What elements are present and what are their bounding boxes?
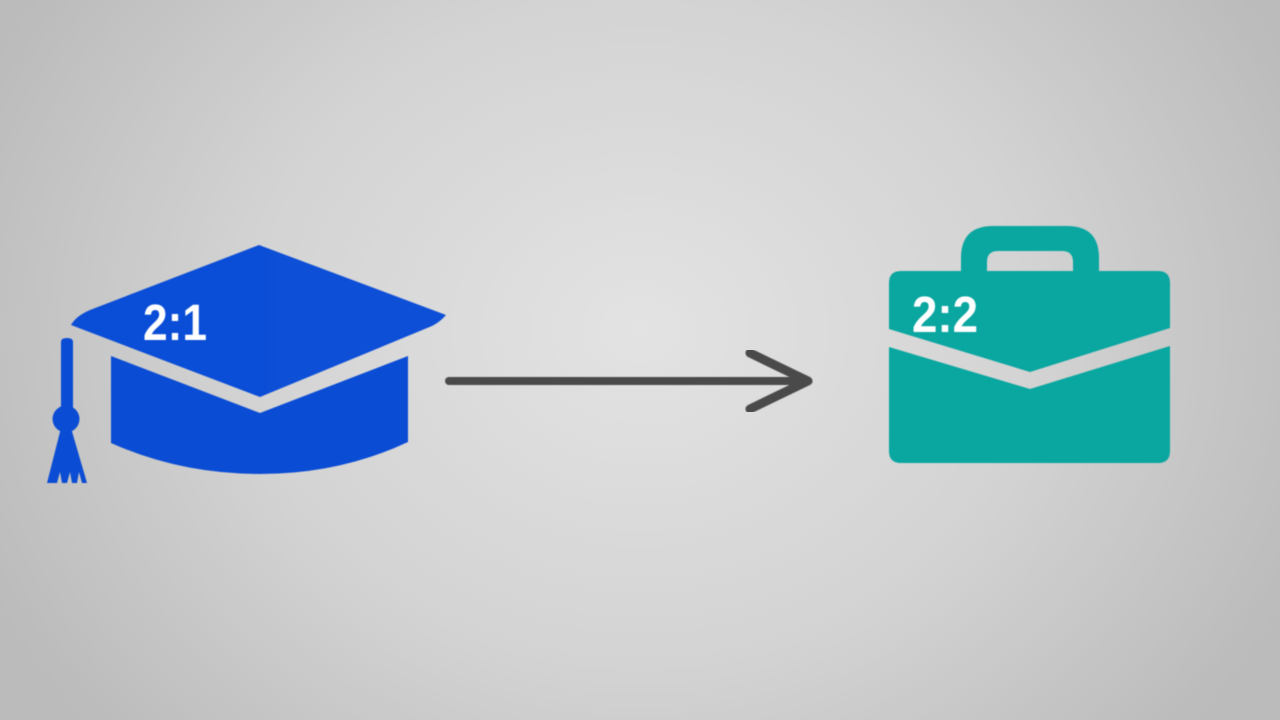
arrow <box>449 353 808 409</box>
icon: graduation cap <box>47 245 446 483</box>
tassel <box>47 338 87 483</box>
cap base <box>111 356 408 474</box>
label: 2:2: 2:2 <box>912 286 978 343</box>
cap board <box>71 245 446 397</box>
case lower <box>889 346 1170 463</box>
label: 2:1: 2:1 <box>143 294 207 351</box>
case upper <box>889 271 1170 372</box>
icon: briefcase <box>889 226 1170 463</box>
handle <box>961 226 1099 275</box>
